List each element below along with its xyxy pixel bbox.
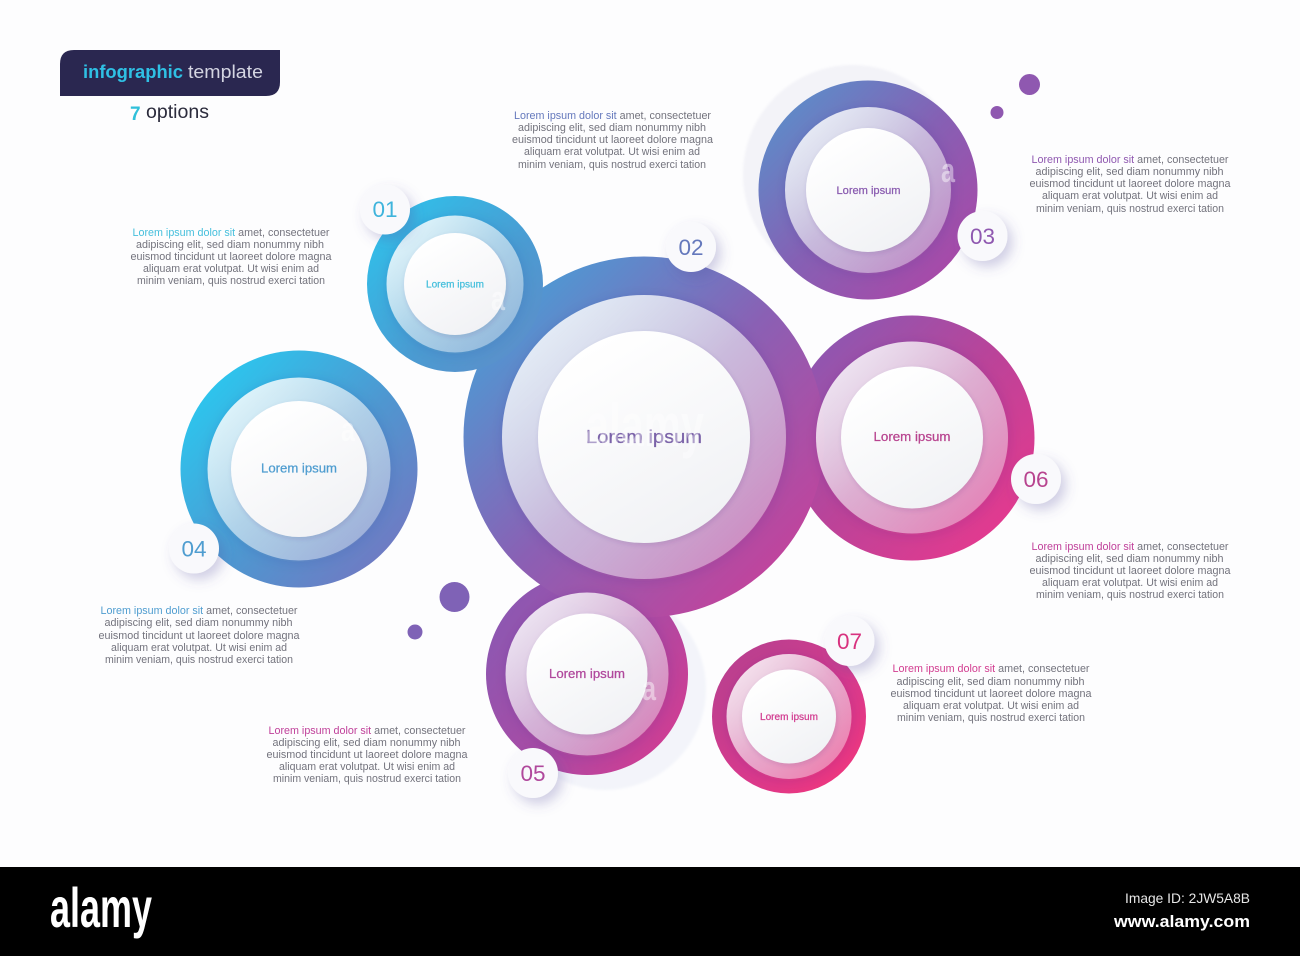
subtitle: 7 options: 7: [130, 104, 141, 125]
text block 03: adipiscing elit, sed diam nonummy nibh: [1036, 166, 1224, 178]
option 03 circle: Lorem ipsum: [836, 185, 900, 197]
watermark letters: a: [941, 152, 956, 190]
text block 05: euismod tincidunt ut laoreet dolore magna: [266, 749, 468, 761]
text block 07: minim veniam, quis nostrud exerci tation: [897, 712, 1085, 724]
text block 06: minim veniam, quis nostrud exerci tation: [1036, 589, 1224, 601]
badge 02: 02: [678, 235, 704, 260]
text block 04: Lorem ipsum dolor sit amet, consectetuer: [100, 605, 298, 617]
text block 02: aliquam erat volutpat. Ut wisi enim ad: [524, 146, 700, 158]
text block 05: adipiscing elit, sed diam nonummy nibh: [272, 737, 460, 749]
footer band: www.alamy.com: [1113, 912, 1250, 931]
option 02 outer disc: [464, 256, 824, 618]
badge 05: 05: [520, 761, 546, 786]
option 05 ring and label: Lorem ipsum: [549, 667, 625, 681]
option 03 circle: [758, 80, 978, 300]
text block 07: Lorem ipsum dolor sit amet, consectetuer: [892, 663, 1090, 675]
text block 07: aliquam erat volutpat. Ut wisi enim ad: [903, 700, 1079, 712]
badge 03: [958, 211, 1008, 261]
text block 05: minim veniam, quis nostrud exerci tation: [273, 773, 461, 785]
text block 05: aliquam erat volutpat. Ut wisi enim ad: [279, 761, 455, 773]
option 07 circle: Lorem ipsum: [760, 712, 818, 723]
option 05 ring and label: [506, 592, 668, 756]
dots lower left: [408, 582, 470, 640]
text block 02: [512, 110, 714, 171]
text block 06: aliquam erat volutpat. Ut wisi enim ad: [1042, 577, 1218, 589]
decorative crescent behind circle 05: [504, 588, 706, 790]
text block 06: euismod tincidunt ut laoreet dolore magna: [1030, 565, 1231, 577]
text block 04: aliquam erat volutpat. Ut wisi enim ad: [111, 642, 287, 654]
option 02 ring and label: Lorem ipsum: [586, 427, 702, 447]
badge 05: [508, 748, 558, 798]
option 01 ring and label: [386, 216, 524, 352]
text block 06: [1030, 541, 1231, 601]
badge 01: [360, 184, 410, 234]
watermark letters: a: [491, 280, 506, 318]
dots top right: [990, 74, 1040, 119]
option 04 circle: [180, 350, 418, 588]
badge 02: [666, 222, 716, 272]
text block 01: minim veniam, quis nostrud exerci tation: [137, 275, 325, 287]
option 06 outer disc: [790, 316, 1034, 560]
badge 04: [169, 524, 219, 574]
option 01 outer disc: [367, 196, 543, 372]
option 06 ring and label: [816, 342, 1008, 534]
badge 04: 04: [181, 536, 207, 562]
text block 04: euismod tincidunt ut laoreet dolore magna: [98, 630, 300, 642]
text block 01: [130, 227, 332, 287]
decorative crescent behind circle 03: [743, 65, 962, 284]
watermark letters: a: [642, 670, 657, 708]
footer logo: alamy: [50, 876, 152, 939]
option 01 ring and label: Lorem ipsum: [426, 280, 484, 290]
title banner: [60, 50, 280, 96]
badge 07: [824, 616, 874, 666]
text block 03: [1030, 154, 1231, 215]
text block 01: euismod tincidunt ut laoreet dolore magna: [130, 251, 332, 263]
badge 06: [1011, 454, 1061, 504]
text block 02: Lorem ipsum dolor sit amet, consectetuer: [514, 110, 711, 122]
badge 06: 06: [1023, 467, 1049, 492]
title banner: infographic: [83, 61, 183, 82]
text block 01: Lorem ipsum dolor sit amet, consectetuer: [132, 227, 330, 239]
text block 03: aliquam erat volutpat. Ut wisi enim ad: [1042, 190, 1218, 202]
text block 07: [890, 663, 1092, 724]
text block 04: [98, 605, 300, 666]
badge 03: 03: [970, 224, 995, 249]
text block 02: euismod tincidunt ut laoreet dolore magna: [512, 134, 714, 146]
badge 07: 07: [837, 629, 862, 654]
option 04 circle: Lorem ipsum: [261, 462, 337, 476]
option 07 circle: [712, 640, 866, 794]
text block 03: euismod tincidunt ut laoreet dolore magna: [1030, 178, 1231, 190]
text block 06: adipiscing elit, sed diam nonummy nibh: [1036, 553, 1224, 565]
text block 05: [266, 725, 468, 785]
text block 06: Lorem ipsum dolor sit amet, consectetuer: [1032, 541, 1229, 553]
text block 01: adipiscing elit, sed diam nonummy nibh: [136, 239, 324, 251]
text block 02: adipiscing elit, sed diam nonummy nibh: [518, 122, 706, 134]
badge 01: 01: [372, 197, 398, 222]
text block 02: minim veniam, quis nostrud exerci tation: [518, 159, 706, 171]
text block 03: minim veniam, quis nostrud exerci tation: [1036, 203, 1224, 215]
text block 05: Lorem ipsum dolor sit amet, consectetuer: [268, 725, 466, 737]
watermark letters: a: [341, 411, 356, 449]
subtitle: 7 options: options: [146, 102, 209, 123]
text block 04: adipiscing elit, sed diam nonummy nibh: [104, 617, 292, 629]
footer band: [0, 867, 1300, 956]
text block 07: euismod tincidunt ut laoreet dolore magna: [890, 688, 1092, 700]
text block 03: Lorem ipsum dolor sit amet, consectetuer: [1032, 154, 1229, 166]
text block 01: aliquam erat volutpat. Ut wisi enim ad: [143, 263, 319, 275]
option 05 outer disc: [486, 573, 688, 775]
footer band: Image ID: 2JW5A8B: [1125, 890, 1250, 906]
option 02 ring and label: [502, 295, 786, 579]
text block 07: adipiscing elit, sed diam nonummy nibh: [896, 676, 1084, 688]
title banner: template: [188, 61, 263, 82]
option 06 ring and label: Lorem ipsum: [874, 429, 950, 444]
watermark letters: alamy: [586, 392, 704, 459]
text block 04: minim veniam, quis nostrud exerci tation: [105, 654, 293, 666]
watermark letters: [341, 152, 956, 708]
